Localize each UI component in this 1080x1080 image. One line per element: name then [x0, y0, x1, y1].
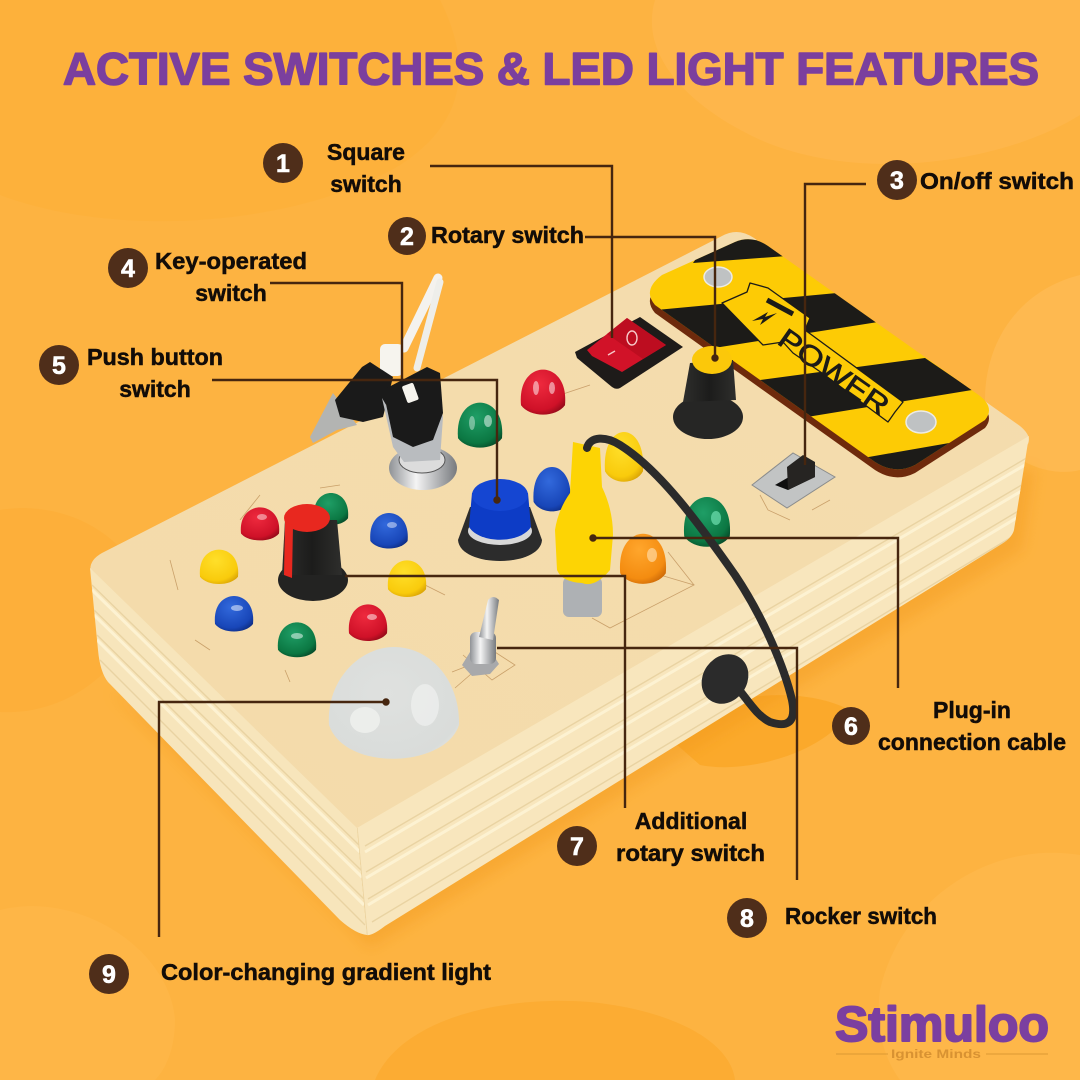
callout 8: rocker switch: 8 — [740, 905, 754, 933]
red rotary knob — [278, 504, 348, 601]
callout 7: additional rotary switch: 7 — [570, 833, 584, 861]
callout 8: rocker switch: Rocker switch — [785, 903, 937, 929]
callout 6: plug-in connection cable — [832, 697, 1066, 755]
LED: green upper — [458, 403, 502, 448]
callout 5: push button switch: 5 — [52, 352, 66, 380]
LED: blue behind plug — [533, 467, 571, 511]
key switch with lanyard — [310, 278, 457, 490]
callout 5: push button switch: Push button — [87, 344, 223, 370]
white gradient light — [329, 647, 459, 759]
callout 1: square switch: Square — [327, 139, 405, 165]
logo: Stimuloo: Stimuloo — [835, 998, 1049, 1052]
callout 2: rotary switch: 2 — [400, 223, 414, 251]
callout 3: on/off switch — [877, 160, 1074, 200]
callout 3: on/off switch: 3 — [890, 167, 904, 195]
callout 1: square switch: switch — [330, 171, 402, 197]
orange LED — [620, 534, 666, 584]
callout 7: additional rotary switch: Additional — [635, 808, 747, 834]
title: ACTIVE SWITCHES & LED LIGHT FEATURES — [63, 44, 1039, 94]
callout 5: push button switch — [39, 344, 223, 402]
LED cluster left — [200, 493, 426, 657]
callout 9: color-changing gradient light: Color-changing gradient light — [161, 959, 491, 985]
callout 2: rotary switch: Rotary switch — [431, 222, 584, 248]
callout 4: key-operated switch: switch — [195, 280, 267, 306]
LED: green right — [684, 497, 730, 547]
callout 8: rocker switch — [727, 898, 937, 938]
callout 6: plug-in connection cable: 6 — [844, 713, 858, 741]
callout 9: color-changing gradient light — [89, 954, 491, 994]
power label: POWER — [773, 323, 895, 421]
yellow plug — [555, 442, 613, 617]
square rocker switch — [575, 317, 683, 389]
callout 5: push button switch: switch — [119, 376, 191, 402]
LED: yellow behind plug — [605, 432, 643, 482]
callout 9: color-changing gradient light: 9 — [102, 961, 116, 989]
toggle switch — [462, 597, 499, 676]
callout 6: plug-in connection cable: connection cable — [878, 729, 1066, 755]
callout 1: square switch: 1 — [276, 150, 290, 178]
screws — [704, 267, 936, 433]
callout 4: key-operated switch: 4 — [121, 255, 135, 283]
callout 7: additional rotary switch: rotary switch — [616, 840, 765, 866]
slide on/off switch — [752, 453, 835, 508]
connection cable — [587, 439, 793, 724]
leader lines — [159, 166, 898, 937]
callout 6: plug-in connection cable: Plug-in — [933, 697, 1011, 723]
callout 4: key-operated switch: Key-operated — [155, 248, 307, 274]
callout 3: on/off switch: On/off switch — [920, 168, 1074, 194]
callout 2: rotary switch — [388, 217, 584, 255]
black rotary knob — [673, 346, 743, 439]
callout 4: key-operated switch — [108, 248, 307, 306]
wooden board — [90, 232, 1030, 935]
board shadow — [110, 470, 1034, 948]
blue push button — [458, 479, 542, 561]
callout 7: additional rotary switch — [557, 808, 765, 866]
callout 1: square switch — [263, 139, 405, 197]
logo: Stimuloo: Ignite Minds — [891, 1047, 981, 1061]
power label — [722, 283, 903, 422]
engraved decorations — [170, 385, 830, 688]
power panel — [650, 239, 989, 478]
LED: red upper — [521, 370, 565, 415]
